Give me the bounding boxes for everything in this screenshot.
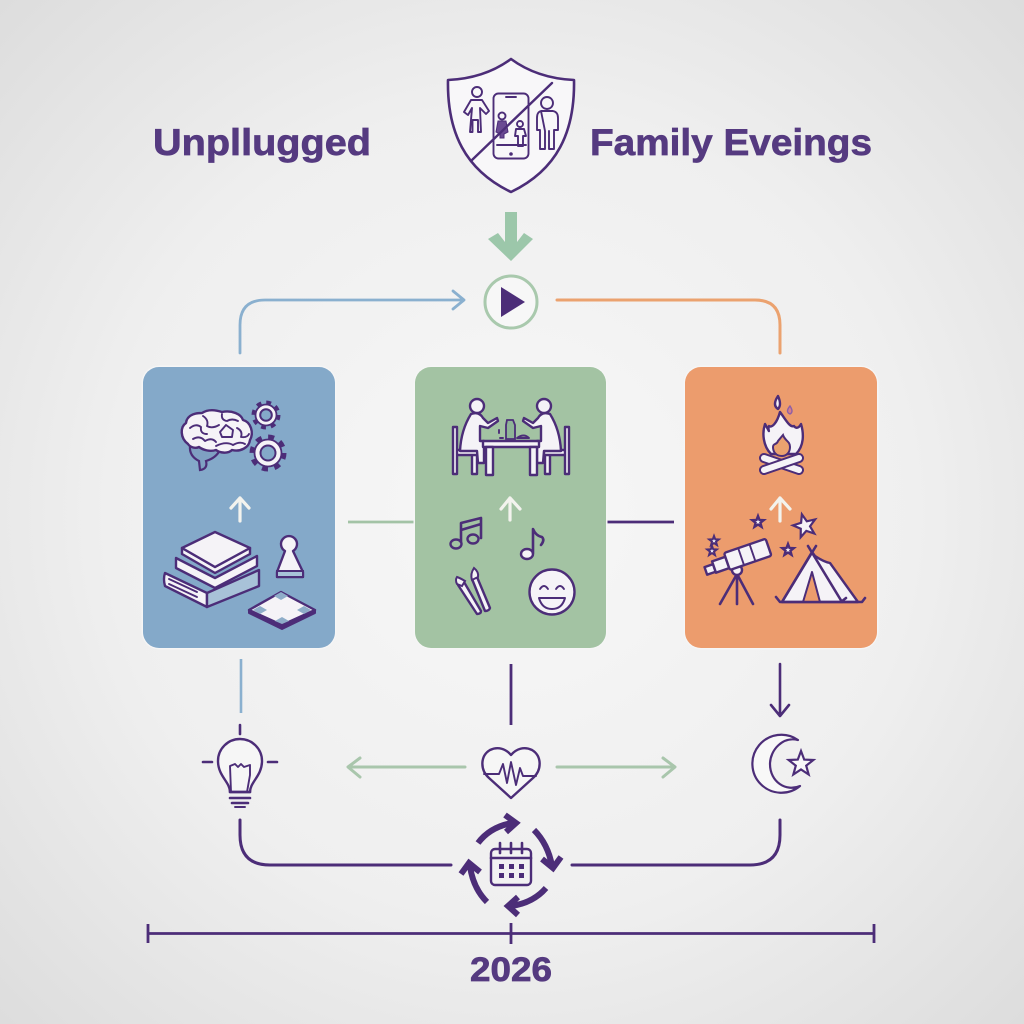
panel: green card	[414, 366, 608, 650]
icon: board game pawn	[277, 536, 303, 577]
icon: small gear	[254, 402, 278, 428]
arrow: up arrow in green card	[501, 498, 520, 520]
connector: green card to heart	[510, 664, 512, 725]
icon: heart with pulse	[482, 748, 540, 798]
connector: blue to green card	[348, 521, 416, 523]
title: Unpllugged: Unpllugged	[153, 122, 371, 163]
year label: 2026	[470, 951, 552, 989]
connector: blue card to lightbulb	[240, 659, 242, 713]
icon: single music note	[521, 529, 543, 559]
icon: two people at table	[453, 399, 569, 475]
icon: moon and star	[752, 735, 813, 793]
connector: lightbulb to calendar	[240, 820, 451, 865]
arrow: green down arrow	[488, 212, 533, 261]
icon: brain	[182, 410, 252, 470]
icon: shield with crossed-out phone and family	[448, 59, 574, 192]
title: Family Eveings: Family Eveings	[590, 122, 872, 163]
connector: moon to calendar	[572, 820, 780, 865]
icon: telescope	[702, 539, 771, 604]
icon: calendar with cycle arrows	[461, 815, 561, 915]
connector: green to orange card	[606, 521, 674, 523]
arrow: up arrow in blue card	[231, 498, 249, 521]
icon: double music note	[450, 518, 481, 548]
icon: stars	[707, 511, 819, 555]
icon: game board	[249, 592, 315, 629]
icon: play button	[485, 276, 537, 328]
icon: campfire	[763, 396, 803, 470]
arrow: orange connector from play button	[557, 300, 780, 353]
icon: paint brushes	[456, 568, 490, 614]
arrow: orange card to moon	[771, 664, 789, 716]
panel: blue card	[142, 366, 336, 650]
icon: stack of books	[164, 532, 259, 607]
icon: smiley face	[530, 570, 574, 614]
arrow: green arrow left	[348, 758, 465, 777]
arrow: green arrow right	[557, 758, 675, 777]
icon: lightbulb	[203, 725, 277, 807]
timeline	[148, 923, 874, 944]
panel: orange card	[684, 366, 878, 650]
arrow: up arrow in orange card	[771, 498, 790, 521]
arrow: blue connector to play button	[240, 291, 464, 353]
icon: large gear	[252, 437, 284, 469]
icon: tent	[776, 546, 865, 602]
